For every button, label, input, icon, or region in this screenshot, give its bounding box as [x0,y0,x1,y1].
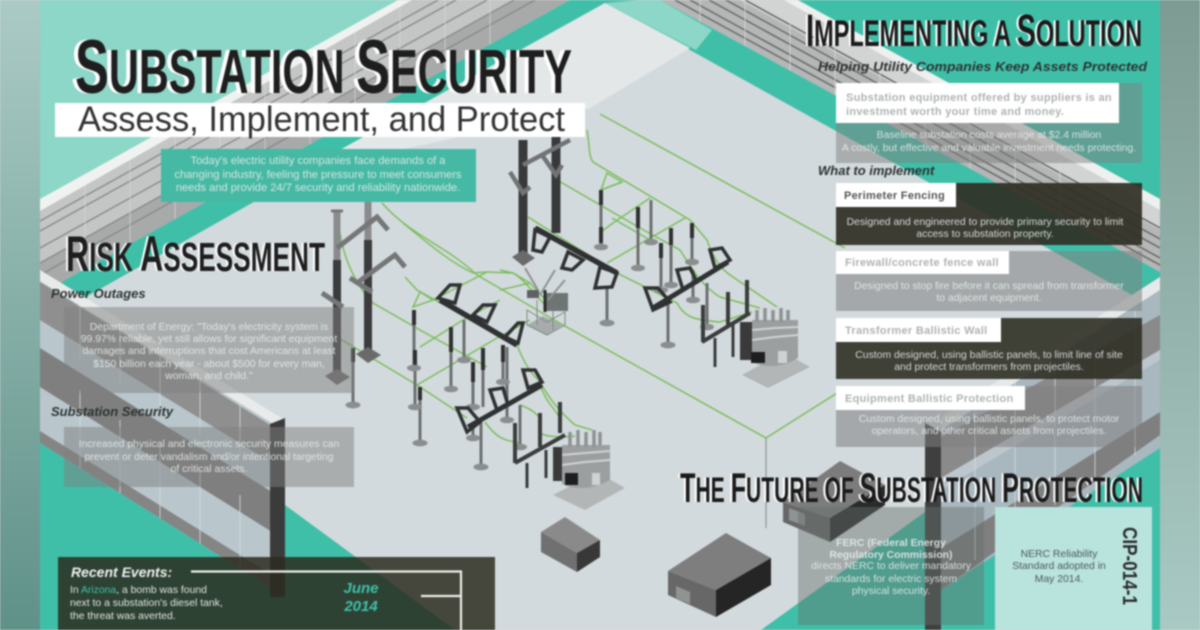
panel: recent events: In Arizona, a bomb was found [70,585,207,596]
panel: power outages: $150 billion each year - about $500 for every man, [93,359,325,370]
wall end post: left [270,418,285,597]
panel: firewall: Designed to stop fire before it can spread from transformer [854,281,1124,292]
equipment box: small [541,517,600,572]
panel: perimeter fencing [836,183,1142,245]
back left wall [40,0,570,294]
transformer: center [525,268,568,335]
transformer: lower [553,430,625,510]
equipment box: rear [783,461,885,542]
side strip: right [1160,0,1200,630]
panel: substation security [64,427,354,487]
panel: ferc: standards for electric system [825,574,957,585]
back right wall [660,0,1160,275]
title: SUBSTATION SECURITY [71,25,568,110]
panel: perimeter fencing: access to substation property. [916,229,1054,240]
panel: ferc [798,507,984,625]
insulator rack: right [645,248,730,310]
subheading: what to implement: What to implement [818,163,935,178]
tall gantry towers: left [322,200,405,385]
panel: investment: A costly, but effective and valuable investment needs protecting. [842,143,1136,154]
front right wall [941,277,1160,590]
subheading: helping utility companies: Helping Utility Companies Keep Assets Protected [818,59,1148,74]
panel: perimeter fencing: Perimeter Fencing [844,190,945,202]
panel: power outages [64,307,354,393]
panel: equipment ballistic protection: Custom designed, using ballistic panels, to protect motor [859,414,1120,425]
heading: risk assessment: RISK ASSESSMENT [64,226,323,282]
panel: ferc: directs NERC to deliver mandatory [811,561,972,572]
panel: power outages: Department of Energy: "Today's electricity system is [90,322,328,333]
panel: power outages: 99.97% reliable, yet still allows for significant equipment [81,334,337,345]
panel: nerc standard: May 2014. [1035,574,1083,585]
panel: equipment ballistic protection [836,386,1142,447]
tall gantry towers: center [510,137,570,266]
heading: implementing a solution: IMPLEMENTING A SOLUTION [804,5,1140,56]
panel: firewall: Firewall/concrete fence wall [845,257,999,269]
insulator rack: left [438,285,523,345]
intro text box [161,149,476,202]
panel: substation security: Increased physical and electronic security measures can [79,439,339,450]
intro text box: changing industry, feeling the pressure to meet consumers [174,169,462,181]
panel: firewall: to adjacent equipment. [936,293,1042,304]
wall end post: right [925,423,941,630]
insulator rack: lower [457,370,542,432]
front left wall [40,270,285,597]
equipment box: large [668,533,771,617]
title: SUBSTATION SECURITY [75,25,572,110]
panel: nerc standard: NERC Reliability [1021,549,1098,560]
subheading: power outages: Power Outages [51,286,146,301]
panel: nerc standard [995,507,1152,630]
panel: recent events [58,557,495,630]
subheading: substation security: Substation Security [51,404,174,419]
panel: transformer ballistic wall: Transformer Ballistic Wall [845,325,988,337]
panel: firewall [836,251,1142,311]
panel: ferc: physical security. [852,586,930,597]
green wiring [337,114,845,443]
panel: substation security: prevent or deter vandalism and/or intentional targeting [85,452,334,463]
panel: transformer ballistic wall: Custom designed, using ballistic panels, to limit line of site [855,350,1123,361]
small pedestal insulators [346,190,714,470]
panel: perimeter fencing: Designed and engineered to provide primary security to limit [847,217,1123,228]
intro text box: needs and provide 24/7 security and reliability nationwide. [176,182,460,194]
panel: ferc: FERC (Federal Energy [836,538,946,549]
subtitle banner: Assess, Implement, and Protect [78,100,565,139]
panel: equipment ballistic protection: operators, and other critical assets from projectiles. [871,426,1107,437]
panel: recent events: June [343,580,379,597]
panel: recent events: 2014 [343,598,378,615]
panel: recent events: next to a substation's diesel tank, [70,598,223,609]
intro text box: Today's electric utility companies face demands of a [191,155,446,167]
panel: power outages: woman, and child." [164,371,253,382]
panel: investment: investment worth your time and money. [846,106,1064,118]
panel: nerc standard: Standard adopted in [1012,561,1106,572]
panel: transformer ballistic wall [836,318,1142,379]
side strip: left [0,0,40,630]
heading: implementing a solution: IMPLEMENTING A SOLUTION [806,5,1142,56]
panel: ferc: Regulatory Commission) [830,550,952,561]
panel: transformer ballistic wall: and protect transformers from projectiles. [894,362,1084,373]
panel: investment [836,83,1142,163]
disconnect switch: right [702,280,750,367]
disconnect switch: lower [515,402,565,488]
panel: recent events: the threat was averted. [70,611,176,622]
panel: nerc standard: CIP-014-1 [1118,527,1140,605]
panel: recent events: Recent Events: [71,564,172,580]
ground conductor drop [765,438,767,528]
panel: investment: Baseline substation costs average at $2.4 million [877,130,1102,141]
panel: substation security: of critical assets. [171,464,247,475]
panel: equipment ballistic protection: Equipment Ballistic Protection [845,393,1014,405]
light teal corner [40,0,406,203]
heading: risk assessment: RISK ASSESSMENT [66,226,325,282]
panel: investment: Substation equipment offered by suppliers is an [846,92,1112,104]
transformer: right [740,308,810,388]
panel: power outages: damages and interruptions that cost Americans at least [83,346,336,357]
insulator rack: center upper [533,228,617,288]
